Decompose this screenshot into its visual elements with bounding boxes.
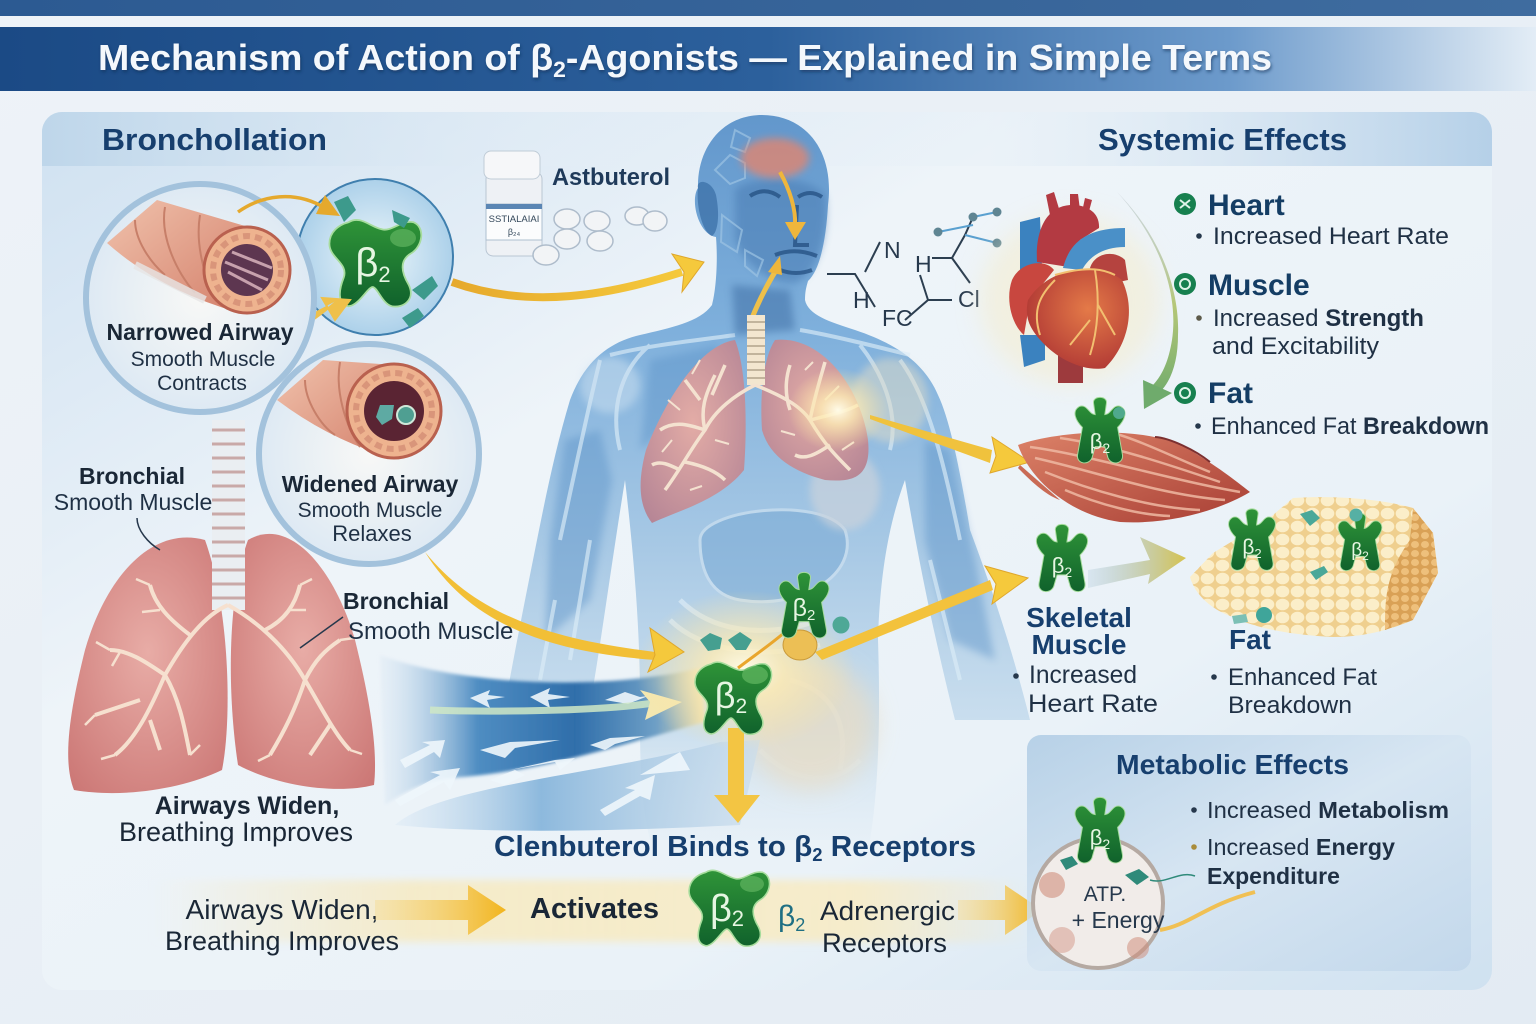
- muscle tissue: [1018, 397, 1250, 522]
- arrow: airway to central receptor: [425, 552, 684, 672]
- label: narrowed airway: [106, 319, 294, 395]
- airway circle: narrowed: [86, 184, 314, 412]
- arrow: widen to activates: [375, 885, 506, 935]
- label: skeletal muscle: Skeletal: [1026, 602, 1132, 633]
- effect: muscle: [1174, 269, 1424, 360]
- label: narrowed airway: Contracts: [157, 372, 247, 395]
- heading: Bronchollation: Bronchollation: [102, 122, 327, 157]
- label: bronchial smooth muscle right: [300, 588, 513, 648]
- human body figure: [505, 115, 1030, 840]
- fat tissue: β: [1242, 536, 1254, 559]
- liver shade: [810, 450, 880, 530]
- airway circle: widened: [259, 344, 479, 564]
- fat tissue: β: [1351, 540, 1362, 561]
- central lungs: [641, 315, 888, 523]
- arrow: muscle to fat: [1088, 537, 1186, 588]
- label: airways widen left: Breathing Improves: [119, 817, 353, 847]
- effect: fat: [1174, 377, 1489, 440]
- central receptor main: 2: [736, 695, 747, 718]
- heading: clenbuterol binds: Receptors: [823, 831, 976, 863]
- skeletal muscle receptor: β: [1052, 553, 1064, 578]
- lower pale airflow band: [395, 740, 760, 831]
- panel: metabolic effects: [1027, 735, 1471, 971]
- title band: Mechanism of Action of β: [98, 37, 535, 78]
- arrow: airway to receptor: [238, 195, 340, 216]
- pill bottle: β₂₄: [508, 227, 520, 237]
- title band: 2: [553, 57, 566, 82]
- curved green arrow: [1117, 192, 1178, 409]
- right shoulder bone fill: [852, 358, 928, 442]
- ATP cell: + Energy: [1072, 907, 1165, 933]
- effect: muscle: Muscle: [1208, 269, 1310, 302]
- label: airways widen bottom: [165, 894, 399, 956]
- label: narrowed airway: Smooth Muscle: [131, 348, 275, 371]
- face shading: [735, 179, 826, 283]
- arrow: receptor down: [714, 728, 760, 823]
- arrow: brain down: [780, 172, 806, 240]
- label: bronchial smooth muscle right: Bronchial: [343, 588, 449, 614]
- blue airflow band: [380, 590, 855, 816]
- label: adrenergic receptors: Receptors: [822, 928, 947, 958]
- fat tissue: [1190, 497, 1438, 637]
- arm shading: [545, 345, 995, 660]
- ear: [698, 182, 718, 236]
- bottom receptor: β: [710, 888, 732, 930]
- receptor circle: [297, 179, 453, 335]
- stomach organs: [700, 510, 847, 602]
- title band: [0, 27, 1536, 91]
- effect list: Increased Energy: [1207, 834, 1395, 860]
- bottom receptor: [689, 870, 770, 946]
- label: narrowed airway: Narrowed Airway: [106, 319, 294, 345]
- label: airways widen left: [119, 792, 353, 847]
- label: skeletal muscle: [1013, 602, 1158, 718]
- face features: [750, 191, 822, 273]
- label: bronchial smooth muscle left: [54, 463, 212, 550]
- chemical structure: H: [915, 251, 932, 277]
- chemical structure: [827, 208, 1002, 331]
- effect: heart: Increased Heart Rate: [1213, 223, 1449, 250]
- neck dark shading: [732, 285, 795, 335]
- label: bronchial smooth muscle left: Bronchial: [79, 463, 185, 489]
- label: adrenergic receptors: β: [778, 900, 795, 933]
- ATP cell: ATP.: [1084, 883, 1126, 906]
- receptor circle: 2: [378, 262, 391, 287]
- skeletal muscle receptor: [1036, 524, 1088, 592]
- effect: muscle: Increased Strength: [1213, 305, 1424, 332]
- effect list: Increased Metabolism: [1207, 797, 1449, 823]
- receptor circle: β: [355, 241, 378, 285]
- pelvis glow: [745, 660, 875, 790]
- central receptor top: β: [793, 594, 807, 622]
- heart: [980, 192, 1160, 385]
- label: skeletal muscle: Muscle: [1032, 629, 1126, 660]
- effect: fat: Enhanced Fat Breakdown: [1211, 413, 1489, 440]
- chemical structure: FC: [882, 305, 913, 331]
- effect: heart: Heart: [1208, 189, 1285, 222]
- central receptor main: β: [715, 675, 736, 716]
- arrow: lung to muscle: [870, 415, 1030, 473]
- chemical structure: H: [853, 287, 870, 313]
- effect: fat: Fat: [1208, 377, 1253, 410]
- arrow: receptor to body: [452, 254, 704, 297]
- yellow pathway band: [150, 880, 1030, 942]
- fat tissue: 2: [1254, 546, 1262, 561]
- panel header band: [42, 112, 1492, 166]
- label: skeletal muscle: Heart Rate: [1028, 690, 1158, 718]
- label: adrenergic receptors: Adrenergic: [820, 896, 955, 926]
- label: widened airway: Smooth Muscle: [298, 499, 442, 522]
- label: adrenergic receptors: 2: [795, 915, 805, 935]
- heading: clenbuterol binds: Clenbuterol Binds to β: [494, 831, 805, 863]
- label: skeletal muscle: Increased: [1029, 661, 1137, 689]
- label: Astbuterol: Astbuterol: [552, 164, 670, 191]
- chemical structure: Cl: [958, 286, 980, 312]
- arrow: receptor bottom connector: [268, 298, 350, 336]
- skull texture: [715, 130, 763, 276]
- effect: muscle: and Excitability: [1212, 333, 1379, 360]
- label: bronchial smooth muscle left: Smooth Muscle: [54, 489, 212, 515]
- receptor on cell: 2: [1102, 836, 1110, 852]
- receptor on cell: [1075, 797, 1125, 863]
- label: widened airway: [282, 471, 458, 546]
- muscle tissue: β: [1090, 429, 1102, 454]
- top strip: [0, 0, 1536, 16]
- trachea: [212, 420, 245, 610]
- muscle tissue: 2: [1102, 440, 1110, 456]
- shoulder bone fill: [580, 357, 640, 413]
- central receptor main: [695, 662, 772, 734]
- heading: Systemic Effects: Systemic Effects: [1098, 122, 1347, 157]
- label: fat: Breakdown: [1228, 692, 1352, 719]
- label: fat: Fat: [1229, 624, 1271, 655]
- bottom receptor: 2: [732, 906, 744, 931]
- pills: [533, 207, 667, 265]
- label: widened airway: Relaxes: [332, 521, 412, 546]
- pill bottle: [484, 151, 667, 265]
- airway tube: [107, 200, 290, 313]
- label: fat: Enhanced Fat: [1228, 664, 1377, 691]
- label: airways widen left: Airways Widen,: [155, 792, 339, 820]
- tube shadow: [135, 265, 205, 300]
- effect: heart: [1174, 189, 1449, 250]
- pill bottle: SSTIALAIAI: [489, 214, 539, 225]
- arrow: trachea up: [752, 256, 782, 318]
- fat tissue: 2: [1362, 549, 1369, 563]
- label: activates: Activates: [530, 893, 659, 925]
- label: fat: [1211, 624, 1377, 719]
- heading: metabolic effects: Metabolic Effects: [1116, 749, 1349, 780]
- label: bronchial smooth muscle right: Smooth Muscle: [348, 618, 513, 645]
- label: adrenergic receptors: [778, 896, 955, 958]
- lower lungs: [68, 420, 375, 793]
- receptor on cell: β: [1090, 825, 1102, 850]
- central receptor top: [700, 572, 850, 660]
- arrow: central receptor to skeletal muscle: [738, 566, 1028, 668]
- label: airways widen bottom: Airways Widen,: [186, 894, 378, 925]
- central receptor top: 2: [807, 607, 815, 624]
- intestines: [670, 600, 860, 778]
- label: airways widen bottom: Breathing Improves: [165, 926, 399, 956]
- chemical structure: N: [884, 237, 901, 263]
- shoulder and arm highlights: [540, 330, 960, 680]
- ATP cell: [1033, 838, 1255, 968]
- effect list: Expenditure: [1207, 863, 1340, 889]
- skeletal muscle receptor: 2: [1064, 564, 1072, 580]
- label: widened airway: Widened Airway: [282, 471, 458, 497]
- flow arrows: [395, 688, 690, 816]
- brain glow: [741, 138, 809, 178]
- arrow: receptors to ATP: [958, 885, 1042, 935]
- title band: -Agonists — Explained in Simple Terms: [566, 37, 1272, 78]
- effect list: [1191, 797, 1449, 889]
- heading: clenbuterol binds: 2: [812, 845, 823, 865]
